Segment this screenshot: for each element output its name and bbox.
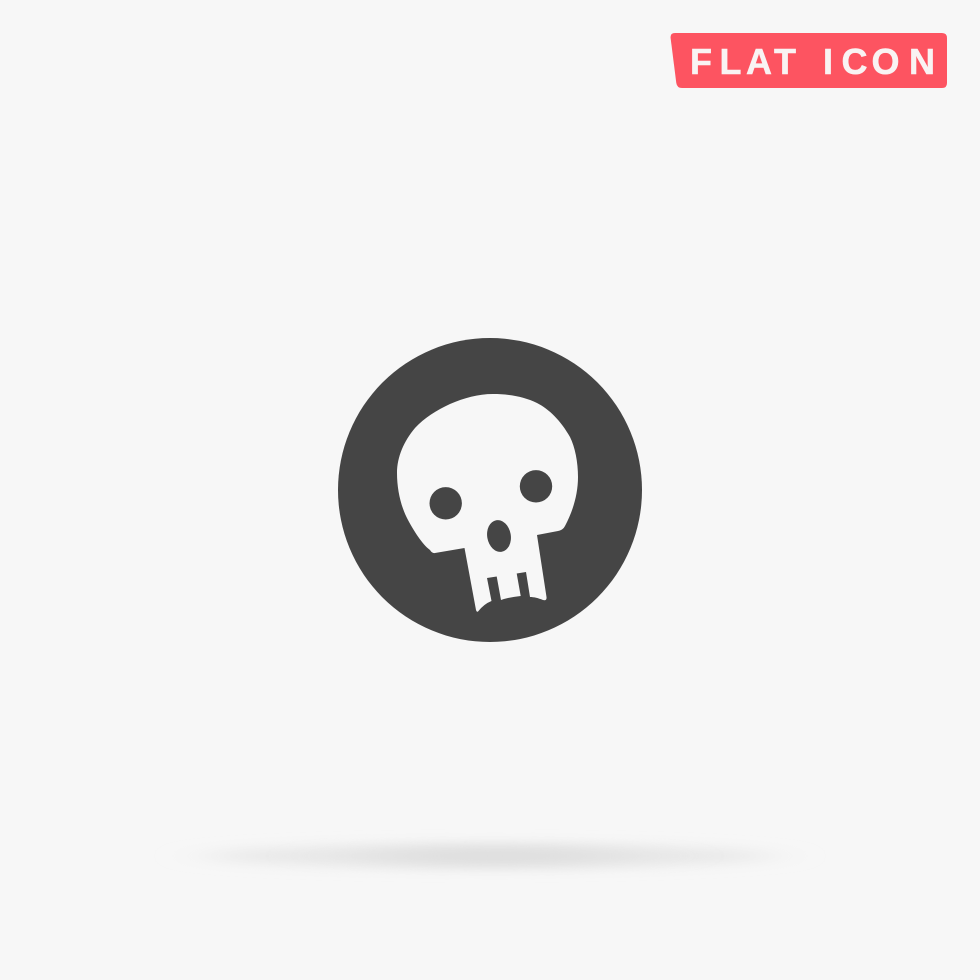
left eye bbox=[430, 487, 462, 520]
icon: skull in circle bbox=[338, 338, 642, 642]
badge: flat icon: FLAT ICON bbox=[690, 41, 935, 82]
right eye bbox=[520, 470, 552, 502]
badge: flat icon bbox=[671, 33, 947, 88]
skull silhouette bbox=[397, 394, 578, 612]
ground shadow bbox=[205, 844, 775, 868]
nose bbox=[485, 518, 513, 554]
